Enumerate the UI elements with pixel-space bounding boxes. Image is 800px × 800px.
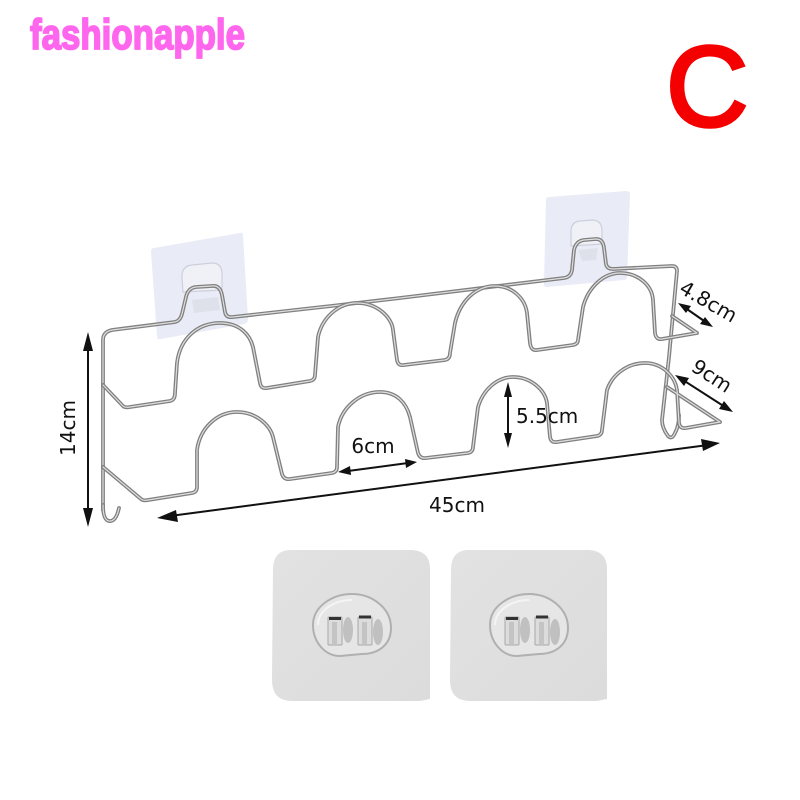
dimension: depth 4.8cm: 4.8cm bbox=[676, 276, 741, 327]
wire: upper wavy row bbox=[103, 273, 697, 407]
adhesive hook pad: right bbox=[450, 550, 607, 701]
version letter C: C bbox=[666, 24, 748, 151]
adhesive hook pad: left bbox=[272, 550, 430, 701]
dimension: depth 9cm bbox=[675, 354, 737, 412]
transparent oval hook housing bbox=[313, 594, 391, 656]
dimension: arch height 5.5cm bbox=[504, 382, 578, 448]
adhesive pad: left, mounted bbox=[151, 233, 248, 339]
transparent oval hook housing bbox=[490, 594, 568, 656]
dimension: total width 45cm bbox=[157, 439, 720, 522]
wire rack bbox=[103, 239, 720, 521]
dimension: gap 6cm: 6cm bbox=[351, 434, 395, 458]
wire frame: back rail with hanging tabs and side posts bbox=[103, 239, 679, 510]
wire: left hook bbox=[103, 505, 119, 521]
adhesive pad: right, mounted bbox=[544, 191, 630, 287]
wire: lower wavy row bbox=[103, 363, 720, 500]
dimension: height 14cm bbox=[56, 332, 93, 527]
dimension: arch height 5.5cm: 5.5cm bbox=[516, 404, 578, 428]
dimension: depth 9cm: 9cm bbox=[687, 354, 737, 398]
dimension: gap 6cm bbox=[338, 434, 417, 475]
dimension: total width 45cm: 45cm bbox=[429, 493, 485, 517]
brand logo text: fashionapple bbox=[30, 11, 245, 59]
dimension: height 14cm: 14cm bbox=[56, 400, 80, 456]
